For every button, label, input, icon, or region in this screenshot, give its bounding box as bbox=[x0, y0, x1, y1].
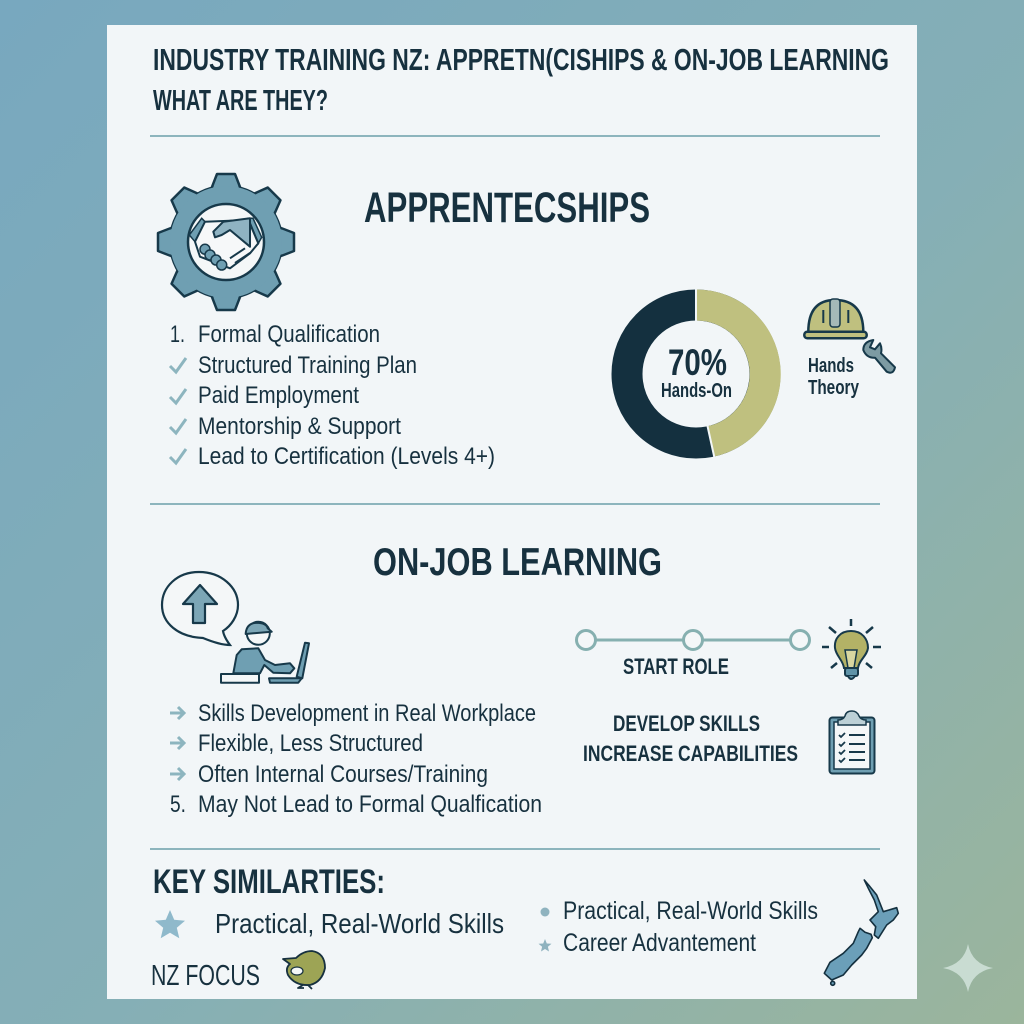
subtitle: WHAT ARE THEY? bbox=[153, 85, 328, 117]
list: apprenticeship points: Structured Training Plan bbox=[198, 352, 417, 379]
list: apprenticeship points: Formal Qualification bbox=[198, 321, 380, 348]
list: similarities right: Practical, Real-World Skills bbox=[563, 897, 818, 925]
text: develop skills: DEVELOP SKILLS bbox=[613, 711, 760, 736]
list: similarities right bbox=[538, 897, 818, 957]
list: similarities right: Career Advantement bbox=[563, 929, 756, 957]
list: on-job learning points: Flexible, Less Structured bbox=[198, 730, 423, 757]
list: on-job learning points: 5. bbox=[170, 791, 186, 818]
heading: apprenticeships: APPRENTECSHIPS bbox=[364, 184, 650, 232]
panel: main card bbox=[107, 25, 917, 999]
list: on-job learning points: Often Internal Courses/Training bbox=[198, 761, 488, 788]
list: apprenticeship points: Lead to Certification (Levels 4+) bbox=[198, 443, 495, 470]
timeline bbox=[576, 630, 810, 650]
text: practical skills: Practical, Real-World Skills bbox=[215, 908, 504, 939]
icon: kiwi bird bbox=[283, 951, 325, 989]
text: develop skills: INCREASE CAPABILITIES bbox=[583, 741, 798, 766]
icon: sparkle watermark bbox=[943, 944, 993, 992]
label: start role: START ROLE bbox=[623, 654, 729, 679]
heading: key similarities: KEY SIMILARTIES: bbox=[153, 863, 385, 901]
legend: hands and theory: Theory bbox=[808, 377, 860, 399]
list: on-job learning points bbox=[170, 700, 542, 818]
icon: hard hat and wrench bbox=[804, 299, 895, 373]
legend: hands and theory: Hands bbox=[808, 355, 854, 377]
list: apprenticeship points: 1. bbox=[170, 321, 185, 348]
icon: clipboard bbox=[830, 711, 874, 774]
icon: gear with handshake bbox=[158, 174, 294, 310]
legend: hands and theory bbox=[808, 355, 860, 399]
text: develop skills bbox=[583, 711, 798, 766]
heading: on-job learning: ON-JOB LEARNING bbox=[373, 541, 662, 584]
icon: worker at laptop bbox=[221, 622, 309, 683]
chart: donut 70% hands-on: 70% bbox=[668, 342, 727, 383]
icon: speech bubble with up arrow bbox=[162, 572, 238, 645]
list: on-job learning points: Skills Development in Real Workplace bbox=[198, 700, 536, 727]
list: apprenticeship points: Paid Employment bbox=[198, 382, 359, 409]
chart: donut 70% hands-on: Hands-On bbox=[661, 380, 732, 402]
icon: star bbox=[155, 910, 185, 938]
icon: New Zealand map bbox=[824, 880, 898, 985]
list: on-job learning points: May Not Lead to Formal Qualfication bbox=[198, 791, 542, 818]
list: apprenticeship points bbox=[170, 321, 495, 470]
label: nz focus: NZ FOCUS bbox=[151, 960, 260, 992]
icon: light bulb bbox=[822, 619, 881, 679]
list: apprenticeship points: Mentorship & Support bbox=[198, 413, 401, 440]
chart: donut 70% hands-on bbox=[627, 289, 765, 458]
